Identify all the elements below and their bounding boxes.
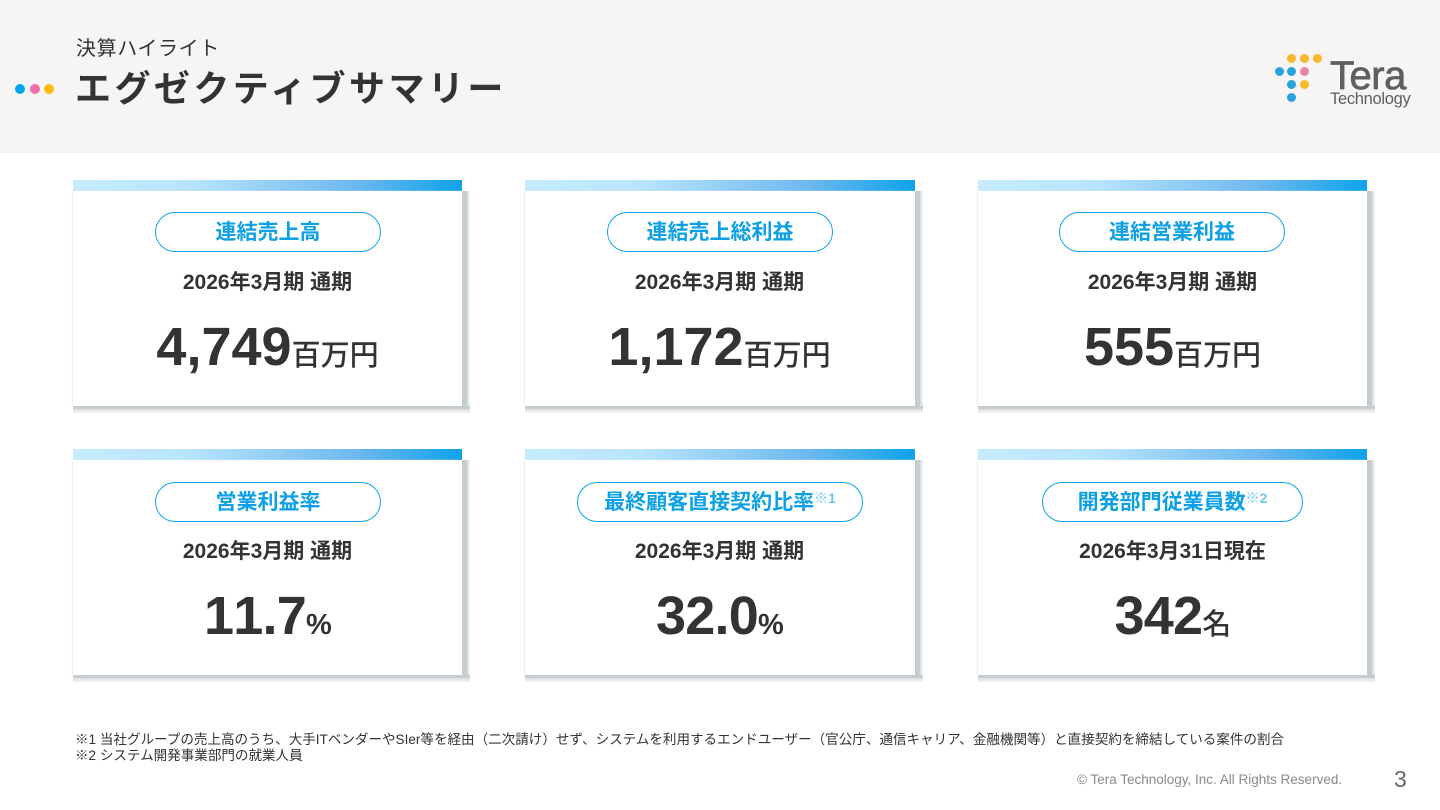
footnotes xyxy=(75,732,1284,762)
value: 555百万円 xyxy=(1084,317,1261,377)
page number: 3 xyxy=(1394,766,1407,792)
label pill: 最終顧客直接契約比率※1 xyxy=(604,486,836,516)
period: 2026年3月期 通期 xyxy=(183,271,352,294)
value: 32.0% xyxy=(656,586,783,646)
period: 2026年3月期 通期 xyxy=(635,271,804,294)
value: 11.7% xyxy=(204,586,331,646)
label pill xyxy=(155,212,381,252)
value: 1,172百万円 xyxy=(608,317,831,377)
label pill xyxy=(1059,212,1285,252)
value: 4,749百万円 xyxy=(156,317,379,377)
label pill: 営業利益率 xyxy=(216,486,320,516)
header band xyxy=(0,0,1440,153)
footnotes: ※1 当社グループの売上高のうち、大手ITベンダーやSIer等を経由（二次請け）せず、システムを利用するエンドユーザー（官公庁、通信キャリア、金融機関等）と直接契約を締結している案件の割合 xyxy=(75,732,1284,747)
panel: 営業利益率 xyxy=(72,449,470,682)
title: エグゼクティブサマリー xyxy=(75,60,507,112)
label pill: 連結営業利益 xyxy=(1109,216,1235,246)
period: 2026年3月期 通期 xyxy=(183,540,352,563)
copyright: © Tera Technology, Inc. All Rights Reserved. xyxy=(1077,772,1342,787)
label pill: 連結売上総利益 xyxy=(646,216,794,246)
section label: 決算ハイライト xyxy=(76,32,220,61)
label pill: 連結売上高 xyxy=(216,216,320,246)
period: 2026年3月31日現在 xyxy=(1079,540,1266,563)
label pill xyxy=(607,212,833,252)
label pill xyxy=(155,482,381,522)
label pill xyxy=(1042,482,1303,522)
panel: 開発部門従業員数 xyxy=(977,449,1375,682)
logo: Tera Technology: Technology xyxy=(1330,90,1410,108)
label pill: 開発部門従業員数※2 xyxy=(1078,486,1267,516)
logo: Tera Technology: Tera xyxy=(1330,54,1406,98)
panel: 連結売上総利益 xyxy=(524,180,923,413)
label pill xyxy=(577,482,863,522)
panel: 最終顧客直接契約比率 xyxy=(524,449,923,682)
logo: Tera Technology xyxy=(1275,54,1411,108)
footnotes: ※2 システム開発事業部門の就業人員 xyxy=(75,748,303,762)
value: 342名 xyxy=(1115,586,1230,646)
period: 2026年3月期 通期 xyxy=(1088,271,1257,294)
panel: 連結営業利益 xyxy=(977,180,1375,413)
icon: three header dots xyxy=(15,84,54,94)
panel: 連結売上高 xyxy=(72,180,470,413)
period: 2026年3月期 通期 xyxy=(635,540,804,563)
